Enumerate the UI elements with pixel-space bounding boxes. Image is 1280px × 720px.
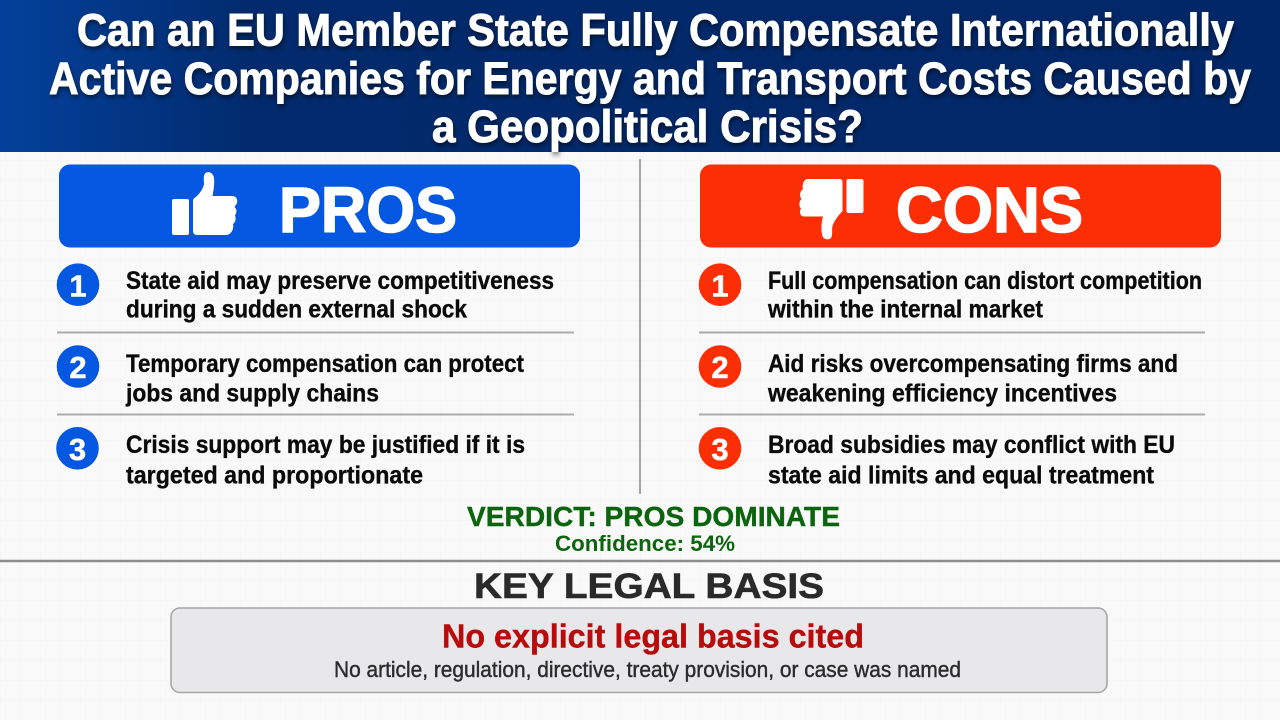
legal basis note: No article, regulation, directive, treaty provision, or case was named [334, 657, 961, 682]
key legal basis heading: KEY LEGAL BASIS [474, 567, 824, 606]
con item 1: Full compensation can distort competition [768, 267, 1202, 295]
title [49, 4, 1251, 152]
con item 2 [699, 345, 1178, 408]
pro item 1: during a sudden external shock [126, 296, 467, 324]
con item 3: Broad subsidies may conflict with EU [768, 431, 1175, 459]
center divider [639, 159, 641, 494]
con item 1 [699, 263, 1202, 324]
header banner [0, 0, 1280, 152]
pro item 3: targeted and proportionate [126, 462, 423, 490]
con item 1: within the internal market [767, 296, 1044, 324]
icon: thumbs up [172, 172, 237, 235]
pro item 2: 2 [69, 350, 87, 385]
legal basis headline: No explicit legal basis cited [442, 618, 864, 654]
pro item 2 [57, 345, 525, 408]
pros label: PROS [279, 174, 457, 246]
con item 2: Aid risks overcompensating firms and [768, 350, 1178, 378]
cons label: CONS [896, 174, 1083, 246]
con item 3 [699, 427, 1175, 490]
pro item 2: Temporary compensation can protect [126, 350, 525, 378]
pro item 2: jobs and supply chains [125, 380, 379, 408]
pro item 3 [56, 427, 525, 490]
icon: thumbs down [799, 179, 864, 239]
con item 2: weakening efficiency incentives [767, 380, 1117, 408]
con item 3: state aid limits and equal treatment [768, 462, 1155, 490]
verdict: Confidence: 54% [555, 531, 735, 556]
pro item 1: 1 [69, 268, 87, 304]
con item 1: 1 [711, 268, 729, 304]
verdict: VERDICT: PROS DOMINATE [467, 501, 840, 532]
pro item 1 [57, 263, 554, 324]
pro item 3: Crisis support may be justified if it is [126, 431, 525, 459]
title: a Geopolitical Crisis? [432, 101, 863, 152]
con item 2: 2 [711, 350, 729, 385]
con item 3: 3 [711, 432, 729, 467]
panel: legal basis [171, 608, 1107, 692]
panel: cons [699, 164, 1221, 490]
pros header [59, 164, 580, 248]
pro item 3: 3 [69, 432, 86, 467]
verdict [467, 501, 840, 556]
panel: pros [56, 164, 580, 490]
pro item 1: State aid may preserve competitiveness [126, 267, 554, 295]
cons header [700, 164, 1221, 248]
